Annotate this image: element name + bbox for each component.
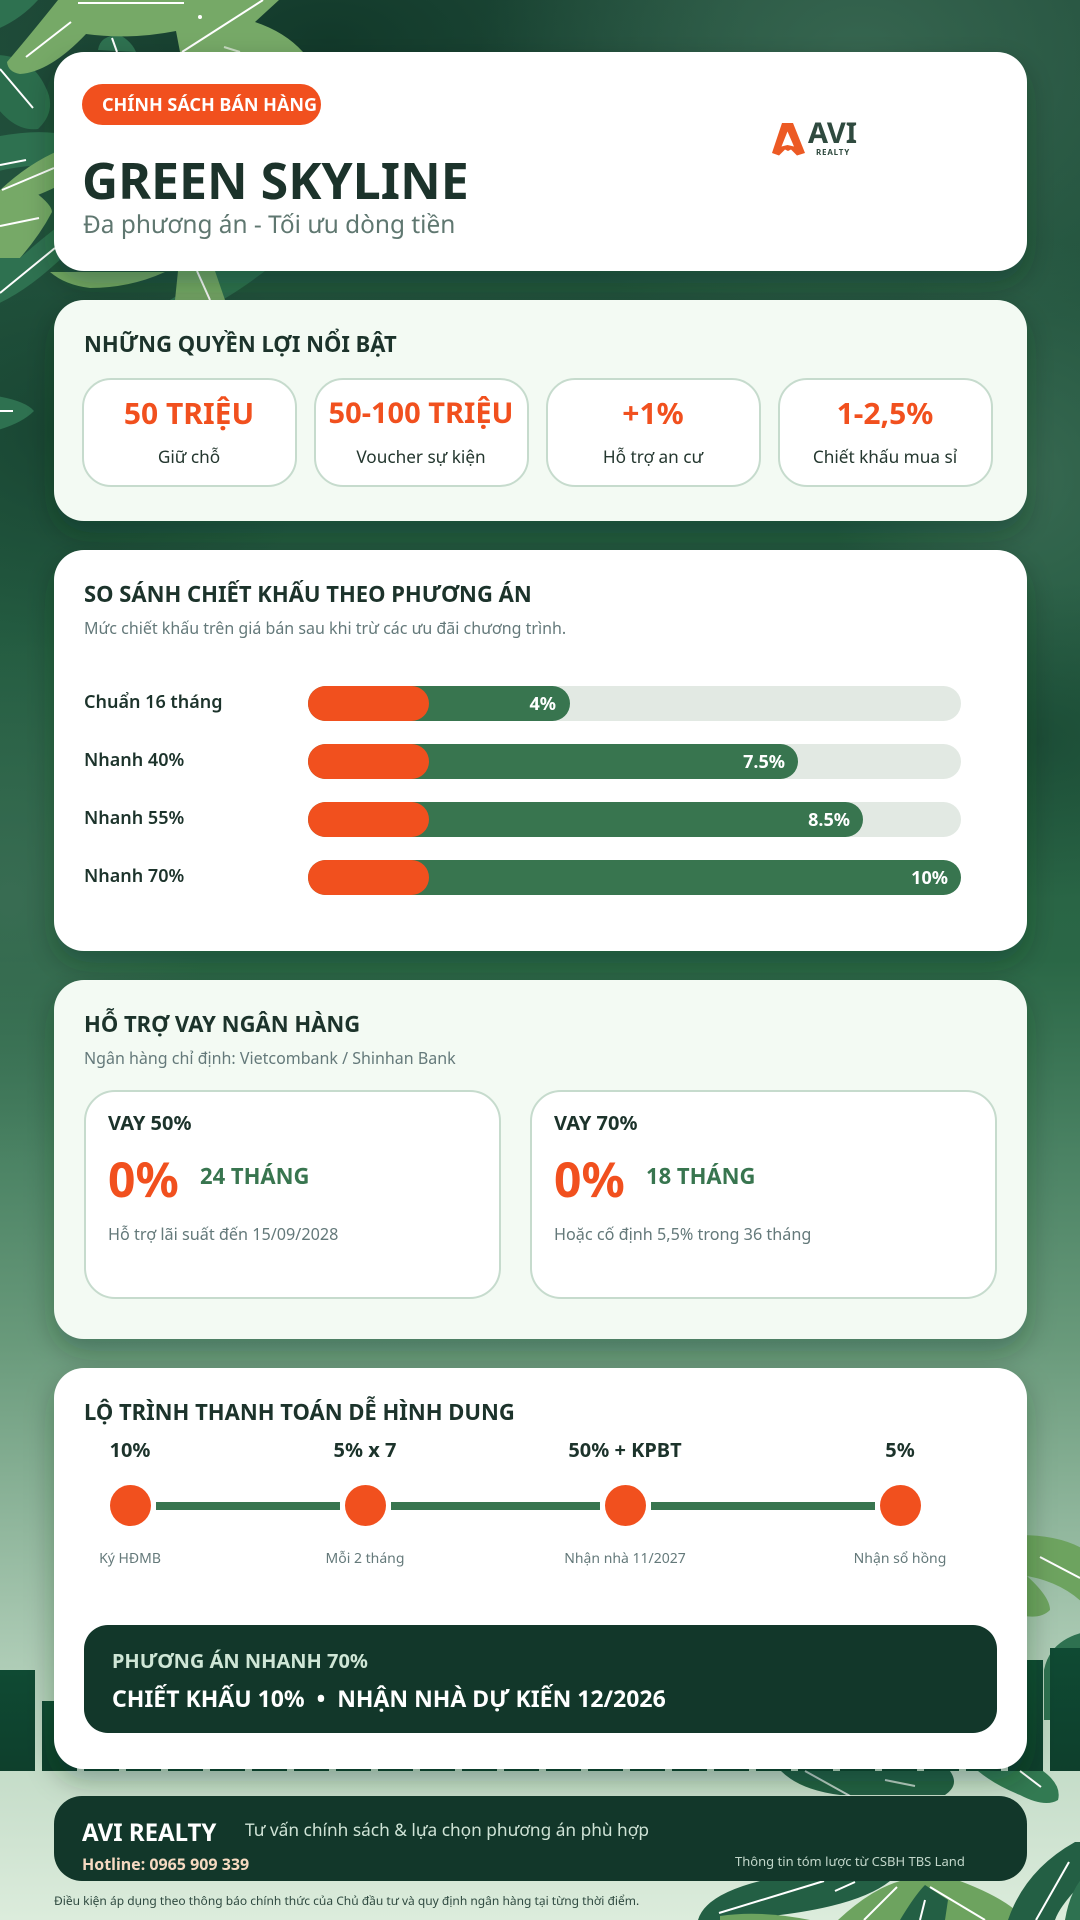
bar: nhanh 55: Nhanh 55% (84, 806, 185, 830)
benefit card: an cư: +1% (622, 392, 684, 433)
bar chart (84, 686, 961, 895)
title: GREEN SKYLINE (82, 146, 469, 214)
disclaimer: Điều kiện áp dụng theo thông báo chính thức của Chủ đầu tư và quy định ngân hàng tại từng thời điểm. (54, 1892, 639, 1909)
comparison heading: SO SÁNH CHIẾT KHẤU THEO PHƯƠNG ÁN (84, 579, 532, 609)
leaves: right side behind towers (1020, 1535, 1080, 1720)
step: nhận nhà (564, 1436, 686, 1568)
bar: nhanh 55: 8.5% (808, 808, 850, 832)
badge (82, 84, 321, 125)
benefit card: an cư: Hỗ trợ an cư (603, 446, 705, 469)
benefit card: giữ chỗ: Giữ chỗ (158, 446, 220, 469)
step: ký HĐMB (99, 1436, 161, 1568)
footer bar: Tư vấn chính sách & lựa chọn phương án phù hợp (245, 1819, 649, 1842)
bar: nhanh 70 (84, 860, 961, 895)
logo: REALTY (816, 147, 850, 158)
comparison subtitle: Mức chiết khấu trên giá bán sau khi trừ các ưu đãi chương trình. (84, 617, 566, 639)
footer bar: AVI REALTY (82, 1816, 217, 1849)
leaves: bottom right cluster (698, 1771, 1080, 1920)
callout: fast plan (84, 1625, 997, 1733)
subtitle: Đa phương án - Tối ưu dòng tiền (83, 208, 455, 241)
bar: nhanh 40: 7.5% (743, 750, 785, 774)
panel: header (54, 52, 1027, 271)
step: mỗi 2 tháng: 5% x 7 (334, 1436, 396, 1463)
step: nhận nhà: 50% + KPBT (568, 1436, 682, 1463)
timeline connectors (156, 1502, 875, 1510)
loan card: vay 50: 24 THÁNG (200, 1161, 309, 1191)
leaves: top left cluster (0, 0, 303, 432)
loan card: vay 70 (531, 1091, 996, 1298)
bar: nhanh 70: 10% (911, 866, 948, 890)
badge: CHÍNH SÁCH BÁN HÀNG (102, 93, 317, 117)
footer bar (54, 1796, 1027, 1881)
loan card: vay 70: Hoặc cố định 5,5% trong 36 tháng (554, 1223, 811, 1245)
logo (772, 113, 857, 158)
loan card: vay 50 (85, 1091, 500, 1298)
benefits heading: NHỮNG QUYỀN LỢI NỔI BẬT (84, 328, 397, 359)
benefit card: mua sỉ (779, 379, 992, 486)
loan card: vay 70: 0% (554, 1147, 625, 1212)
loan card: vay 50: 0% (108, 1147, 179, 1212)
panel: payment timeline (54, 1368, 1027, 1769)
bar: nhanh 40 (84, 744, 961, 779)
benefit card: mua sỉ: 1-2,5% (837, 392, 933, 433)
loan card: vay 70: 18 THÁNG (646, 1161, 755, 1191)
step: nhận sổ hồng: Nhận sổ hồng (854, 1549, 946, 1568)
bar: chuẩn 16 tháng: 4% (529, 692, 556, 716)
bar: nhanh 70: Nhanh 70% (84, 864, 185, 888)
step: nhận sổ hồng: 5% (885, 1436, 915, 1463)
timeline heading: LỘ TRÌNH THANH TOÁN DỄ HÌNH DUNG (84, 1397, 515, 1427)
logo: AVI (808, 113, 857, 152)
step: ký HĐMB: Ký HĐMB (99, 1549, 161, 1568)
footer bar: Hotline: 0965 909 339 (82, 1853, 249, 1875)
loan heading: HỖ TRỢ VAY NGÂN HÀNG (84, 1009, 360, 1039)
loan card: vay 50: Hỗ trợ lãi suất đến 15/09/2028 (108, 1223, 338, 1245)
benefit card: an cư (547, 379, 760, 486)
step: mỗi 2 tháng (326, 1436, 404, 1568)
step: nhận sổ hồng (854, 1436, 946, 1568)
step: nhận nhà: Nhận nhà 11/2027 (564, 1549, 686, 1568)
panel: discount comparison (54, 550, 1027, 951)
callout: fast plan: PHƯƠNG ÁN NHANH 70% (112, 1647, 368, 1674)
footer bar: Thông tin tóm lược từ CSBH TBS Land (735, 1852, 965, 1870)
panel: bank loan support (54, 980, 1027, 1339)
bar: chuẩn 16 tháng (84, 686, 961, 721)
benefit card: voucher: Voucher sự kiện (356, 446, 486, 469)
benefit card: mua sỉ: Chiết khấu mua sỉ (813, 446, 958, 469)
building silhouettes (0, 1648, 1080, 1771)
benefit card: giữ chỗ (83, 379, 296, 486)
loan card: vay 50: VAY 50% (108, 1109, 191, 1136)
benefit card: giữ chỗ: 50 TRIỆU (124, 392, 254, 433)
loan subtitle: Ngân hàng chỉ định: Vietcombank / Shinhan Bank (84, 1047, 456, 1069)
step: ký HĐMB: 10% (110, 1436, 150, 1463)
bar: chuẩn 16 tháng: Chuẩn 16 tháng (84, 690, 222, 714)
benefit card: voucher (315, 379, 528, 486)
step: mỗi 2 tháng: Mỗi 2 tháng (326, 1549, 404, 1568)
bar: nhanh 40: Nhanh 40% (84, 748, 185, 772)
bar: nhanh 55 (84, 802, 961, 837)
panel: benefits (54, 300, 1027, 521)
loan card: vay 70: VAY 70% (554, 1109, 637, 1136)
benefit card: voucher: 50-100 TRIỆU (329, 393, 513, 432)
callout: fast plan: CHIẾT KHẤU 10% • NHẬN NHÀ DỰ KIẾN 12/2026 (112, 1682, 666, 1714)
